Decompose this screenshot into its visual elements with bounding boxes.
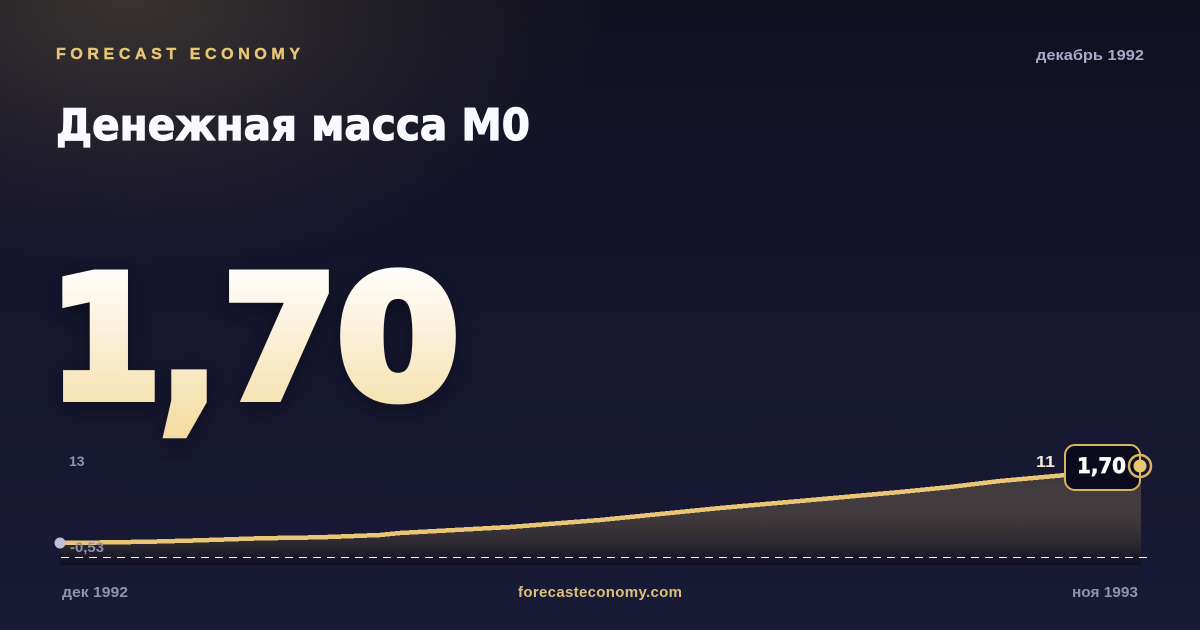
big value: 1 [49,241,161,437]
chart [54,445,1151,565]
title: Денежная масса M0 [56,100,530,151]
end marker [1129,455,1151,477]
date label: декабрь 1992 [1036,47,1144,64]
start marker [54,538,66,548]
source link: forecasteconomy.com [518,584,682,601]
big value: 7 [223,241,337,437]
value badge [1065,445,1140,490]
brand label: FORECAST ECONOMY [56,46,300,63]
zero dashed line [60,556,1147,558]
big value: , [160,243,218,450]
big value: 0 [337,241,459,437]
data line [60,475,1066,543]
axis max label: 13 [69,453,85,469]
axis min label: -0,53 [70,539,104,555]
big value [49,241,459,450]
x axis start label: дек 1992 [62,584,128,601]
value badge: 1,70 [1077,454,1126,478]
area under line [60,466,1141,565]
x axis end label: ноя 1993 [1072,584,1138,601]
peak label: 11 [1036,454,1055,471]
